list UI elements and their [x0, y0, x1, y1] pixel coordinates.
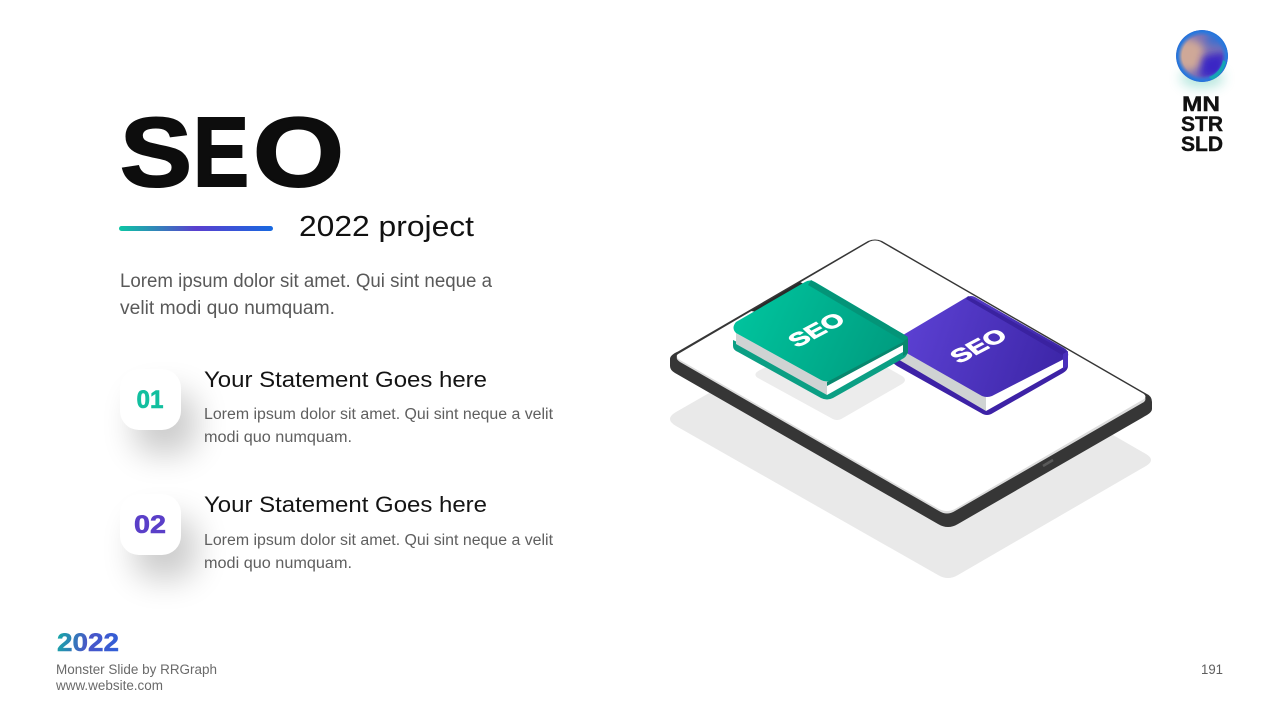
statement text 01: [204, 406, 554, 446]
purple page block: [896, 345, 986, 411]
charging port: [1043, 460, 1053, 466]
isometric tablet illustration: [670, 240, 1152, 578]
statement text 02: modi quo numquam.: [204, 555, 352, 572]
badge 02: [120, 494, 196, 579]
page number: 191: [1201, 661, 1223, 677]
green page block: [736, 333, 827, 395]
green book label: SEO: [782, 308, 850, 351]
title: O: [253, 97, 344, 207]
purple book label: SEO: [944, 324, 1012, 367]
statement heading 02: Your Statement Goes here: [204, 492, 487, 517]
green spine strip: [808, 280, 908, 342]
purple spine strip: [966, 296, 1066, 356]
statement heading 01: Your Statement Goes here: [204, 367, 487, 392]
title: S: [120, 97, 192, 207]
subtitle: 2022 project: [299, 211, 474, 243]
badge 01: 01: [136, 386, 164, 414]
item 01: [120, 367, 554, 454]
green cover: [734, 280, 908, 382]
logo: [1176, 30, 1228, 152]
tablet body: [670, 240, 1152, 527]
green book: [733, 280, 908, 400]
logo orb: [1173, 30, 1230, 88]
logo wordmark: STR: [1181, 113, 1223, 136]
logo wordmark: [1181, 93, 1223, 156]
dark edge behind green book: [751, 282, 804, 312]
intro text: Lorem ipsum dolor sit amet. Qui sint neque a: [120, 271, 492, 292]
gradient divider: [119, 226, 273, 231]
intro text: velit modi quo numquam.: [120, 298, 335, 319]
footer credit: www.website.com: [55, 678, 163, 693]
statement text 02: [204, 532, 554, 572]
footer year: 2022: [57, 629, 119, 657]
logo wordmark: SLD: [1181, 133, 1223, 156]
statement text 01: Lorem ipsum dolor sit amet. Qui sint neque a velit: [204, 406, 554, 423]
green back cover: [733, 340, 908, 400]
tablet ground shadow: [670, 300, 1151, 578]
green book shadow: [755, 335, 905, 420]
footer credit: [55, 662, 217, 693]
statement text 02: Lorem ipsum dolor sit amet. Qui sint neque a velit: [204, 532, 554, 549]
intro text: [120, 271, 492, 319]
logo wordmark: MN: [1182, 93, 1220, 116]
purple cover: [903, 296, 1068, 397]
purple back cover: [893, 352, 1068, 415]
statement text 01: modi quo numquam.: [204, 429, 352, 446]
purple book: [893, 296, 1068, 415]
title: E: [193, 97, 249, 207]
tablet screen: [677, 242, 1146, 514]
footer credit: Monster Slide by RRGraph: [56, 662, 217, 677]
badge 02: 02: [134, 511, 166, 539]
badge 01: [120, 369, 196, 454]
title: [120, 97, 344, 207]
item 02: [120, 492, 554, 579]
